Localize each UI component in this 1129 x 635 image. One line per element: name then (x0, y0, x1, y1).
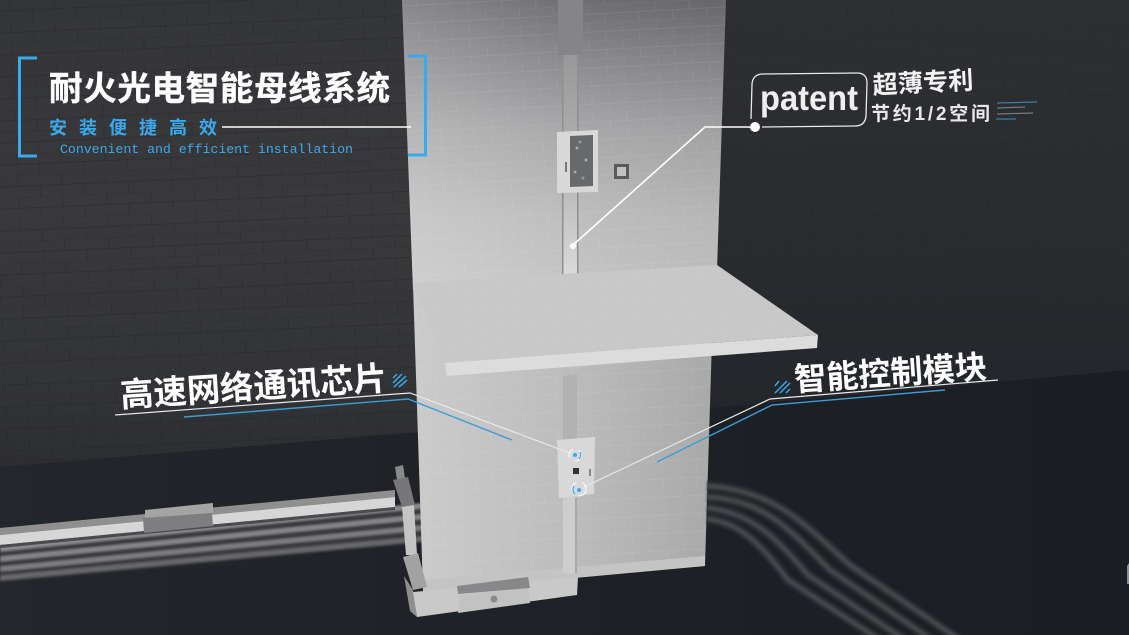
background: brick wall right (710, 0, 1129, 408)
decorative speed lines (996, 102, 1037, 119)
open junction box (557, 130, 598, 193)
background: brick wall left (0, 0, 420, 467)
left floor cables (0, 502, 430, 582)
marker: chip target (569, 449, 581, 461)
far right edge object (1127, 563, 1129, 584)
marker: module target (572, 482, 586, 496)
upper wall duct (558, 0, 583, 283)
patent badge (750, 73, 867, 132)
leader: patent (570, 127, 750, 249)
left busbar duct (0, 490, 395, 548)
icon: hatch marks (775, 381, 790, 393)
patent caption (871, 67, 990, 125)
floor (0, 370, 1129, 635)
duct joint connector (143, 503, 213, 533)
title: 耐火光电智能母线系统 (49, 71, 390, 108)
right floor cables (707, 486, 960, 635)
icon: hatch marks (393, 374, 407, 387)
upper concrete column (402, 0, 726, 290)
title bracket right (408, 56, 426, 155)
callout: high-speed chip: 高速网络通讯芯片 (119, 361, 388, 415)
wall switch (614, 164, 629, 179)
patent badge: patent (760, 79, 858, 118)
patent caption: 节约1/2空间 (871, 102, 990, 125)
patent caption: 超薄专利 (872, 67, 974, 100)
vertical riser and base elbow (393, 460, 578, 617)
callout: control module (584, 349, 998, 487)
lower concrete column (413, 285, 712, 592)
control module box (557, 437, 595, 498)
callout: control module: 智能控制模块 (793, 349, 988, 398)
lower wall duct (563, 374, 577, 440)
callout: high-speed chip (115, 361, 575, 455)
concrete floor slab (413, 265, 818, 376)
english subtitle: Convenient and efficient installation (60, 142, 353, 157)
subtitle rule (222, 126, 411, 128)
title bracket left (20, 58, 37, 156)
subtitle: 安装便捷高效 (49, 117, 217, 138)
